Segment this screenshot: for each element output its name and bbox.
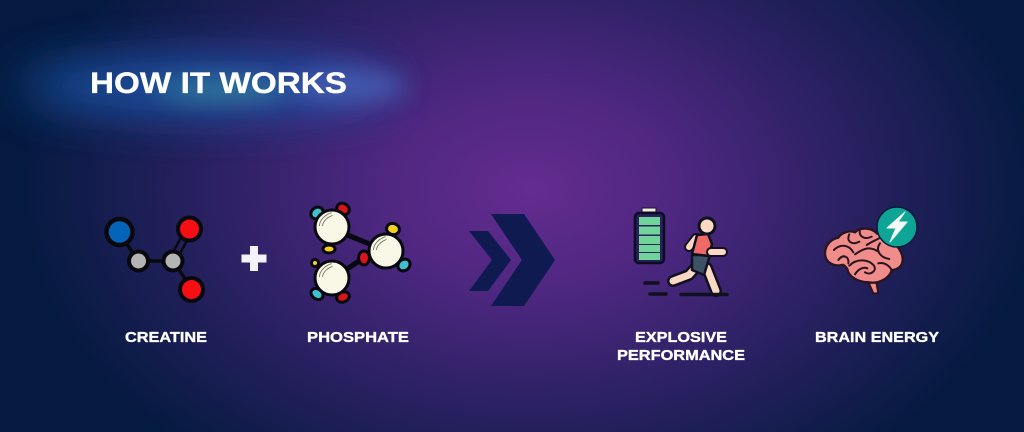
icon: plus: [242, 246, 266, 271]
label: brain energy: BRAIN ENERGY: [815, 330, 939, 346]
icon: phosphate molecule: [309, 201, 413, 304]
title glow: [20, 60, 408, 112]
icon: creatine molecule: [106, 218, 203, 301]
label: explosive performance: EXPLOSIVE: [635, 330, 727, 346]
icon: brain with energy badge: [825, 207, 917, 293]
label: creatine: CREATINE: [125, 330, 207, 346]
motion lines: [645, 283, 727, 294]
icon: battery and runner: [635, 208, 727, 294]
energy badge: [877, 207, 917, 247]
label: explosive performance: [617, 330, 745, 364]
label: phosphate: PHOSPHATE: [307, 330, 409, 346]
brain: [825, 229, 903, 293]
runner: [673, 218, 723, 291]
icon: double chevron arrow: [469, 214, 555, 306]
battery: [635, 208, 664, 263]
label: explosive performance: PERFORMANCE: [617, 348, 745, 364]
title: HOW IT WORKS: [90, 67, 347, 100]
